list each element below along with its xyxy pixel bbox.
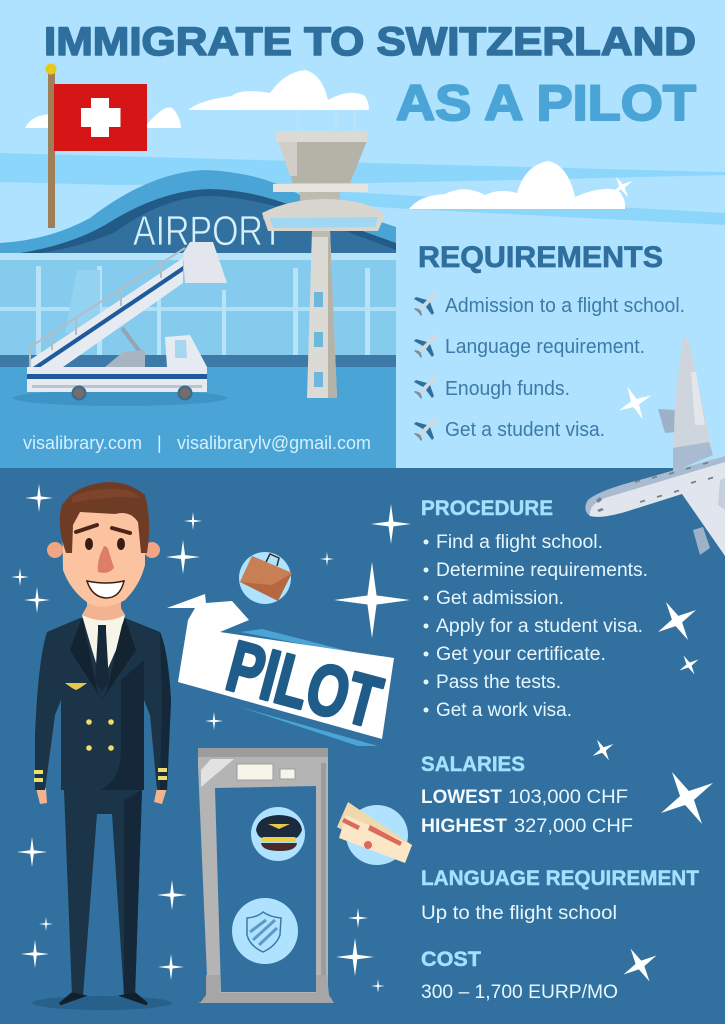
procedure list: Apply for a student visa. xyxy=(436,616,643,637)
airstairs truck xyxy=(13,242,227,406)
hair xyxy=(60,482,149,553)
sign lettering: PILOT xyxy=(219,626,389,744)
contact line: | xyxy=(157,433,162,453)
eyes xyxy=(85,538,93,550)
procedure list: Find a flight school. xyxy=(436,532,603,553)
mouth xyxy=(87,581,124,598)
lapels xyxy=(70,618,136,700)
language text: Up to the flight school xyxy=(421,903,617,924)
terminal glass xyxy=(0,253,396,355)
airport sign: AIRPORT xyxy=(133,207,283,254)
airplane xyxy=(585,337,725,556)
shirt and tie xyxy=(82,615,125,682)
panel: sky background xyxy=(0,0,725,468)
contact line xyxy=(23,433,371,453)
title: IMMIGRATE TO SWITZERLAND xyxy=(44,20,696,64)
highest salary: HIGHEST xyxy=(421,816,507,837)
stars xyxy=(11,379,725,993)
procedure list: Pass the tests. xyxy=(436,672,561,693)
lowest salary: LOWEST xyxy=(421,787,502,808)
hands xyxy=(36,788,167,804)
cloud: centre xyxy=(188,70,369,110)
jacket xyxy=(35,618,171,790)
highest salary: 327,000 CHF xyxy=(514,816,633,837)
cloud: right xyxy=(409,161,625,209)
pilot character xyxy=(32,482,172,1010)
procedure list xyxy=(424,532,648,721)
runway xyxy=(0,355,396,367)
panel: requirements xyxy=(414,241,685,441)
procedure list: Get your certificate. xyxy=(436,644,606,665)
buttons xyxy=(86,719,114,751)
nose xyxy=(98,546,114,573)
heading: procedure: PROCEDURE xyxy=(421,497,553,520)
procedure list: Get a work visa. xyxy=(436,700,572,721)
heading: language requirement: LANGUAGE REQUIREMENT xyxy=(421,867,699,890)
lowest salary: 103,000 CHF xyxy=(508,787,628,808)
panel: language requirement xyxy=(421,867,699,924)
walk-through scanner xyxy=(198,748,334,1003)
icon: boarding tickets xyxy=(337,802,412,865)
neck xyxy=(82,598,125,620)
icon: shield xyxy=(232,898,298,964)
icon: briefcase xyxy=(239,552,292,604)
heading: salaries: SALARIES xyxy=(421,753,525,776)
cloud: behind flag xyxy=(25,107,181,128)
ears xyxy=(47,542,63,558)
panel: cost xyxy=(421,948,618,1003)
panel: procedure xyxy=(421,497,648,721)
requirement 2: Language requirement. xyxy=(445,336,645,358)
procedure list: Determine requirements. xyxy=(436,560,648,581)
panel: airport scene xyxy=(0,170,396,468)
trousers xyxy=(64,790,142,996)
panel: lower background xyxy=(0,468,725,1024)
subtitle: AS A PILOT xyxy=(396,75,696,131)
requirement 1: Admission to a flight school. xyxy=(445,295,685,317)
procedure list: Get admission. xyxy=(436,588,564,609)
cuffs xyxy=(34,768,167,782)
highest salary xyxy=(421,816,633,837)
lowest salary xyxy=(421,787,628,808)
contact line: visalibrarylv@gmail.com xyxy=(177,433,371,453)
control tower xyxy=(262,110,385,398)
brows xyxy=(76,525,97,532)
icon: pilot cap xyxy=(251,807,305,861)
requirement 4: Get a student visa. xyxy=(445,419,605,441)
contact line: visalibrary.com xyxy=(23,433,142,453)
pilot sign xyxy=(167,594,394,746)
heading: cost: COST xyxy=(421,948,481,971)
star: on cloud xyxy=(606,171,638,203)
airport roof xyxy=(0,170,396,256)
panel: salaries xyxy=(421,753,633,837)
face xyxy=(62,510,145,607)
badge xyxy=(65,683,87,690)
requirement 3: Enough funds. xyxy=(445,378,570,400)
cost text: 300 – 1,700 EURP/MO xyxy=(421,982,618,1003)
heading: requirements: REQUIREMENTS xyxy=(418,241,663,274)
flag xyxy=(46,64,147,228)
